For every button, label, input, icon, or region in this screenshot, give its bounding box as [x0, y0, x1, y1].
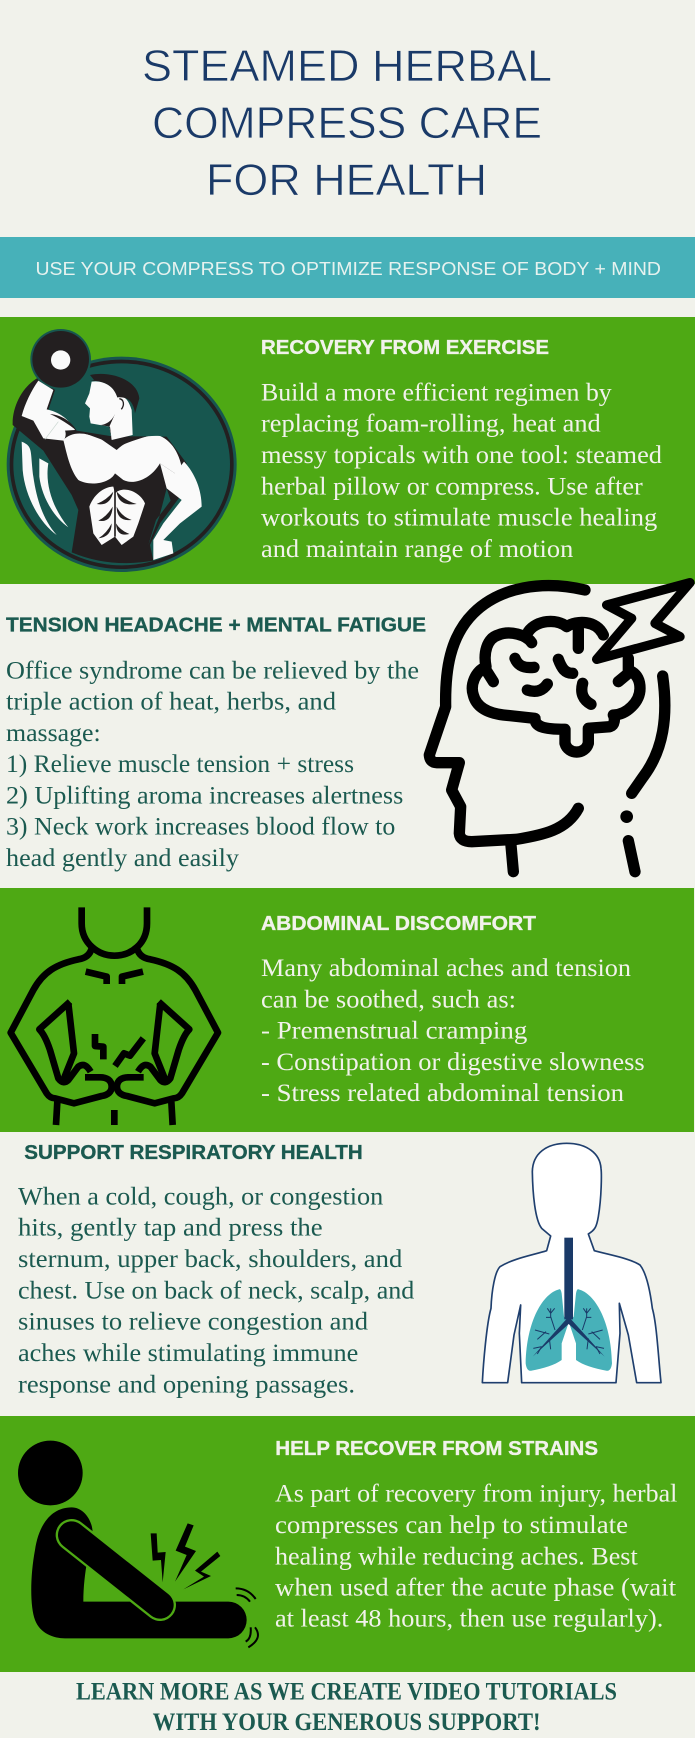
body text: strains: healing while reducing aches. Best	[275, 1541, 638, 1570]
panel: help recover from strains	[0, 1416, 695, 1672]
body text: recovery: messy topicals with one tool: steamed	[261, 440, 662, 469]
body text: tension headache: 2) Uplifting aroma increases alertness	[6, 780, 403, 809]
body text: strains: compresses can help to stimulate	[275, 1510, 628, 1539]
body text: respiratory: response and opening passages.	[18, 1369, 355, 1398]
icon: human silhouette with lungs	[482, 1143, 661, 1383]
body text: tension headache: 1) Relieve muscle tension + stress	[6, 749, 354, 778]
body text: strains: when used after the acute phase (wait	[275, 1573, 676, 1602]
body text: strains	[275, 1479, 677, 1633]
icon: seated person with leg pain	[18, 1441, 258, 1647]
panel: abdominal discomfort	[0, 888, 694, 1132]
body text: tension headache: head gently and easily	[6, 843, 239, 872]
body text: abdominal	[261, 953, 645, 1107]
panel: tension headache and mental fatigue	[6, 583, 690, 872]
body text: respiratory: aches while stimulating immune	[18, 1338, 358, 1367]
icon: torso with abdominal pain	[11, 907, 218, 1125]
body text: strains: at least 48 hours, then use regularly).	[275, 1604, 663, 1633]
panel: support respiratory health	[18, 1142, 661, 1398]
heading: tension headache: TENSION HEADACHE + MENTAL FATIGUE	[6, 615, 426, 637]
body text: abdominal: - Premenstrual cramping	[261, 1016, 528, 1045]
body text: respiratory: When a cold, cough, or congestion	[18, 1181, 384, 1210]
body text: abdominal: Many abdominal aches and tension	[261, 953, 631, 982]
title: STEAMED HERBAL	[142, 42, 552, 91]
body text: strains: As part of recovery from injury, herbal	[275, 1479, 677, 1508]
icon: head with brain and lightning bolt	[429, 583, 690, 872]
body text: abdominal: can be soothed, such as:	[261, 984, 516, 1013]
body text: respiratory: chest. Use on back of neck, scalp, and	[18, 1275, 415, 1304]
body text: tension headache: 3) Neck work increases blood flow to	[6, 812, 395, 841]
call to action: LEARN MORE AS WE CREATE VIDEO TUTORIALS	[76, 1678, 617, 1705]
panel: recovery from exercise	[0, 317, 695, 584]
subtitle banner: USE YOUR COMPRESS TO OPTIMIZE RESPONSE OF BODY + MIND	[36, 258, 661, 279]
body text: recovery: and maintain range of motion	[261, 534, 574, 563]
body text: tension headache: Office syndrome can be relieved by the	[6, 655, 419, 684]
call to action	[76, 1678, 617, 1736]
body text: respiratory	[18, 1181, 415, 1398]
icon: bodybuilder lifting dumbbell	[7, 329, 237, 572]
body text: recovery: Build a more efficient regimen by	[261, 377, 612, 406]
body text: respiratory: hits, gently tap and press the	[18, 1213, 323, 1242]
call to action: WITH YOUR GENEROUS SUPPORT!	[153, 1709, 541, 1736]
title	[142, 42, 552, 205]
body text: respiratory: sinuses to relieve congestion and	[18, 1307, 368, 1336]
body text: abdominal: - Constipation or digestive slowness	[261, 1047, 645, 1076]
body text: recovery: replacing foam-rolling, heat and	[261, 409, 601, 438]
body text: recovery	[261, 377, 662, 563]
subtitle banner	[0, 237, 695, 298]
body text: tension headache: massage:	[6, 718, 101, 747]
title: FOR HEALTH	[206, 156, 487, 205]
heading: recover from strains: HELP RECOVER FROM STRAINS	[275, 1438, 598, 1460]
title: COMPRESS CARE	[152, 99, 542, 148]
body text: tension headache: triple action of heat, herbs, and	[6, 686, 336, 715]
body text: recovery: workouts to stimulate muscle healing	[261, 503, 658, 532]
body text: abdominal: - Stress related abdominal tension	[261, 1078, 624, 1107]
heading: abdominal discomfort: ABDOMINAL DISCOMFORT	[261, 913, 536, 935]
body text: respiratory: sternum, upper back, shoulders, and	[18, 1244, 403, 1273]
heading: recovery from exercise: RECOVERY FROM EXERCISE	[261, 337, 549, 359]
body text: tension headache	[6, 655, 419, 872]
body text: recovery: herbal pillow or compress. Use after	[261, 471, 643, 500]
heading: respiratory health: SUPPORT RESPIRATORY HEALTH	[24, 1142, 363, 1164]
